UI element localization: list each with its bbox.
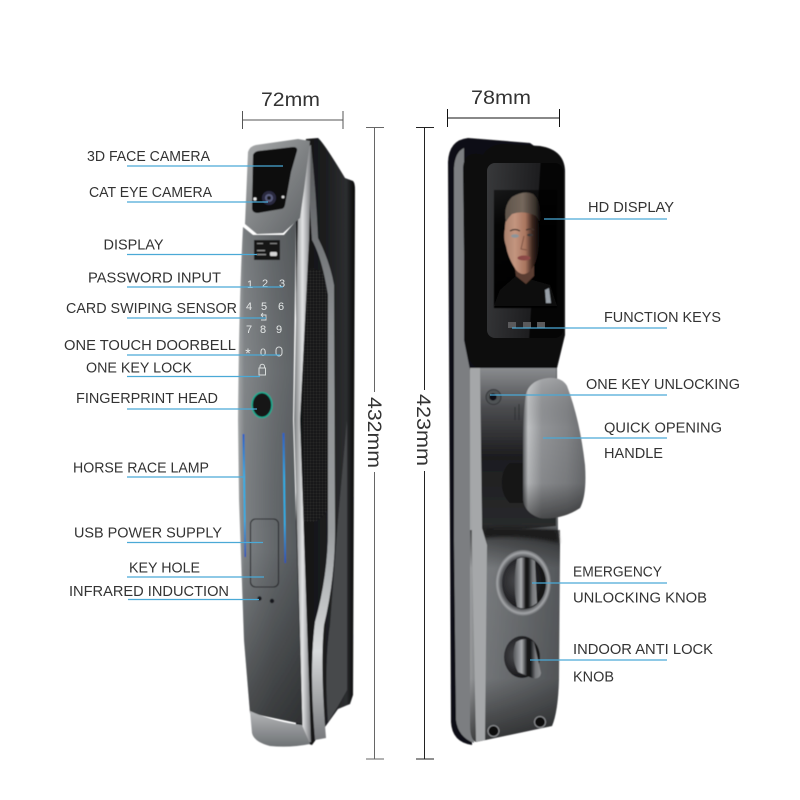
height dimension 432mm: 432mm [363,397,384,468]
callout: emergency unlocking knob: EMERGENCY [573,564,662,580]
callout: fingerprint head: FINGERPRINT HEAD [76,390,218,407]
screw holes [488,726,499,736]
callout: USB power supply: USB POWER SUPPLY [74,524,222,542]
callout: emergency unlocking knob: UNLOCKING KNOB [573,590,707,606]
key hole cover [250,519,278,587]
keypad digits: 8 [260,324,266,336]
height dimension 423mm [412,128,434,759]
callout: one touch doorbell: ONE TOUCH DOORBELL [64,337,236,354]
callout: emergency unlocking knob [532,564,707,606]
callout: indoor anti lock knob: KNOB [573,668,614,686]
keypad digits: 5 [261,301,267,313]
keypad digits: 6 [278,301,284,313]
function keys [508,322,545,328]
rear backing plate [448,138,540,745]
callout: quick opening handle [543,420,722,462]
keypad digits: 3 [279,278,285,290]
side chamfer highlight [470,368,487,742]
right lock: back view [448,138,585,745]
callout: key hole: KEY HOLE [129,560,200,576]
keypad digits: 2 [262,278,268,290]
width dimension 72mm [242,90,343,129]
side silver strip [454,148,474,743]
touch screen [487,163,563,338]
right side highlight stripe [326,420,347,722]
handle silver band [306,145,335,740]
bezel strip [294,145,311,744]
fingerprint ring [252,392,272,418]
callout: HD display [544,199,674,219]
width dimension 72mm: 72mm [261,90,320,111]
callout: infrared induction: INFRARED INDUCTION [69,583,229,600]
indoor knob [504,636,540,678]
lower plate [470,368,560,742]
face plate [238,221,302,724]
height dimension 432mm [363,128,384,759]
callout: HD display: HD DISPLAY [588,199,674,216]
infrared dots [257,596,262,601]
width dimension 78mm [448,88,560,127]
callout: password input: PASSWORD INPUT [88,270,221,286]
callout: one key lock: ONE KEY LOCK [86,360,192,376]
recess around handle [480,368,556,530]
callout: one key unlocking: ONE KEY UNLOCKING [586,376,740,393]
keypad digits: 4 [246,301,252,313]
speaker mesh [303,269,330,522]
callout: quick opening handle: HANDLE [604,445,663,462]
plate step shade [482,527,559,543]
handle shaft [502,463,530,503]
handle [523,378,585,518]
portrait photo [494,190,557,308]
callout: 3D face camera: 3D FACE CAMERA [87,148,210,165]
callout: display: DISPLAY [104,236,164,254]
head frame [245,139,310,234]
camera lens [262,191,276,205]
callout: key hole [127,560,264,577]
callout: function keys: FUNCTION KEYS [604,309,721,326]
display window [254,240,280,260]
blue lamps [242,434,246,557]
screen panel [487,163,563,338]
keypad digits [245,278,285,375]
left lock: front view [238,138,355,747]
base cap [250,711,310,747]
callout: card swiping sensor: CARD SWIPING SENSOR [66,300,237,317]
callout: horse race lamp: HORSE RACE LAMP [73,460,209,476]
keypad digits: 1 [247,279,253,291]
display head [463,144,565,368]
callout: quick opening handle: QUICK OPENING [604,420,722,436]
emergency knob [495,550,551,616]
keypad digits: 7 [246,324,252,336]
callout: cat eye camera: CAT EYE CAMERA [89,184,212,201]
keypad digits: * [245,345,251,361]
callout: indoor anti lock knob [530,641,713,686]
callout: indoor anti lock knob: INDOOR ANTI LOCK [573,641,713,658]
one key unlock button [486,390,501,404]
lock side body [296,138,355,745]
height dimension 423mm: 423mm [412,394,433,466]
camera panel [252,147,297,213]
keypad digits: 0 [260,347,266,359]
width dimension 78mm: 78mm [471,88,531,109]
keypad digits: 9 [276,324,282,336]
